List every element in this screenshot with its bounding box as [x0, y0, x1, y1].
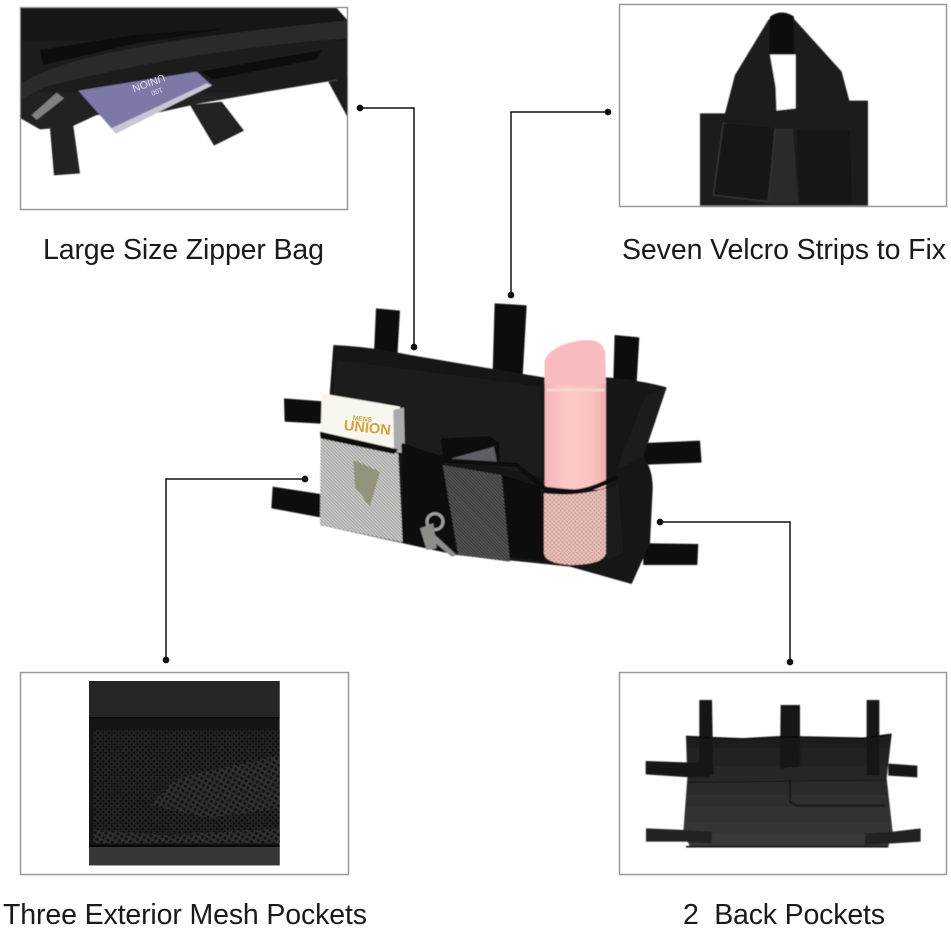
bag body	[320, 345, 667, 584]
leader: velcro strips	[508, 109, 611, 298]
caption: velcro strips: Seven Velcro Strips to Fix	[622, 234, 946, 266]
right mesh side	[607, 483, 623, 560]
left mesh pocket	[320, 432, 403, 542]
leader: zipper bag	[357, 105, 417, 350]
panel: large size zipper bag photo: UNION	[131, 71, 166, 93]
panel: back pockets photo	[620, 672, 946, 874]
book title: UNION	[343, 418, 392, 439]
leader: back pockets	[657, 519, 793, 665]
leader: mesh pockets	[163, 476, 308, 663]
caption: mesh pockets: Three Exterior Mesh Pockets	[3, 899, 367, 931]
book	[321, 393, 405, 453]
keys	[420, 514, 457, 557]
caption: back pockets: 2 Back Pockets	[683, 899, 885, 931]
water bottle	[544, 340, 606, 565]
panel: exterior mesh pockets photo	[20, 672, 348, 874]
panel: large size zipper bag photo: 100	[150, 85, 163, 96]
velcro straps	[271, 303, 702, 565]
center mesh pocket	[402, 445, 617, 562]
panel: large size zipper bag photo	[20, 8, 348, 210]
book title: MENS	[352, 415, 373, 424]
panel: velcro strips photo	[620, 4, 946, 206]
caption: zipper bag: Large Size Zipper Bag	[43, 234, 324, 266]
main product: bag with pockets	[271, 303, 702, 584]
phone	[441, 436, 500, 465]
